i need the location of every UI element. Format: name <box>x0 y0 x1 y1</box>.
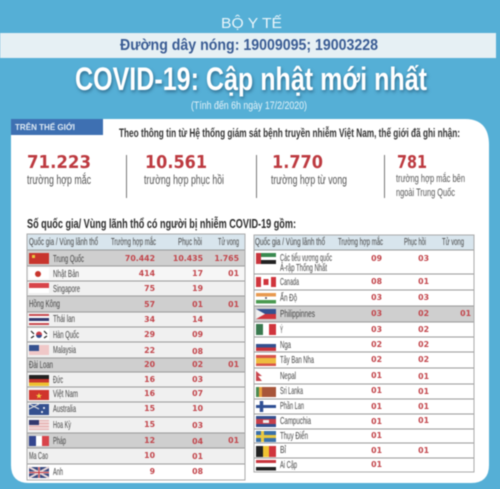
row: Malaysia: 08 <box>192 347 203 356</box>
right table header <box>255 235 464 248</box>
table heading: Số quốc gia/ Vùng lãnh thổ có người bị nhiễm COVID-19 gồm: <box>27 216 296 231</box>
row: Đức: Đức <box>53 374 63 386</box>
row: Bỉ: 01 <box>371 446 382 455</box>
row: Bỉ: 01 <box>418 446 429 455</box>
row: Nhật Bản: 17 <box>192 269 203 278</box>
row: Nepal <box>256 370 429 382</box>
row: Việt Nam: 16 <box>144 389 155 398</box>
row: Philippines: 02 <box>418 309 429 318</box>
row: Việt Nam <box>29 388 203 400</box>
row: Ma Cao: Ma Cao <box>29 450 48 462</box>
row: Nga: Nga <box>280 339 291 351</box>
row: Nga: 02 <box>371 340 382 349</box>
left table header: Quốc gia / Vùng lãnh thổ <box>29 236 98 248</box>
row: Việt Nam: ★ <box>35 392 43 400</box>
stat: cases: 71.223 <box>27 152 91 173</box>
row: Ai Cập: Ai Cập <box>280 459 297 471</box>
row: Trung Quốc: 70.442 <box>125 254 155 263</box>
stat: deaths <box>271 152 347 187</box>
row: Thái Lan <box>29 313 204 325</box>
row: Singapore: Singapore <box>53 283 80 295</box>
row: Thái Lan: 34 <box>144 315 156 324</box>
hotline band <box>0 33 496 58</box>
right table <box>254 235 474 472</box>
left table header <box>29 235 239 248</box>
left table header: Trường hợp mắc <box>111 235 156 248</box>
stat: outside China: ngoài Trung Quốc <box>396 187 455 199</box>
row: Nhật Bản <box>29 268 239 280</box>
section tab: TRÊN THẾ GIỚI <box>15 121 75 132</box>
row: Canada: 08 <box>371 277 382 286</box>
stat: recovered: trường hợp phục hồi <box>144 173 224 187</box>
row: Đức <box>29 374 203 386</box>
row: Pháp: Pháp <box>53 435 66 447</box>
row: Sri Lanka: Sri Lanka <box>280 385 303 397</box>
row: Nepal: 01 <box>371 371 382 380</box>
row: Pháp <box>29 435 239 447</box>
row: Đài Loan <box>29 359 239 371</box>
row: Anh: 9 <box>150 467 155 476</box>
right table header: Phục hồi <box>404 236 426 248</box>
row: Ai Cập: 01 <box>371 460 382 469</box>
row: Anh: 08 <box>192 467 203 476</box>
row: Nga <box>256 339 429 351</box>
row: Phần Lan: 01 <box>418 402 429 411</box>
row: Đài Loan: 01 <box>228 360 239 369</box>
row: Australia: 15 <box>144 404 155 413</box>
row: Singapore: 19 <box>192 284 203 293</box>
row: Đức: 16 <box>144 375 155 384</box>
row: Thái Lan: Thái lan <box>53 313 75 325</box>
row: Sri Lanka: 01 <box>418 387 429 396</box>
row: Hồng Kông <box>29 298 239 310</box>
row: Hồng Kông: 01 <box>228 300 239 309</box>
row: Australia: 10 <box>192 404 204 413</box>
row: Ấn Độ: Ấn Độ <box>280 291 297 304</box>
row: UAE: 03 <box>418 254 429 263</box>
row: Malaysia <box>29 344 203 356</box>
row: Thụy Điển: 01 <box>371 431 382 440</box>
stat: outside China: trường hợp mắc bên <box>396 172 465 185</box>
row: Thụy Điển: Thụy Điển <box>280 430 308 442</box>
row: Singapore <box>29 283 203 295</box>
stat: deaths: 1.770 <box>272 152 323 173</box>
row: Ma Cao: 01 <box>192 452 203 461</box>
row: Hoa Kỳ: 15 <box>144 420 155 429</box>
row: Đài Loan: 20 <box>144 360 156 369</box>
right table header: Trường hợp mắc <box>338 235 383 248</box>
row: Đức: 03 <box>192 375 203 384</box>
stat: outside China <box>396 152 465 199</box>
row: UAE: Các tiểu vương quốc <box>280 252 332 264</box>
row: Hàn Quốc: Hàn Quốc <box>53 329 79 341</box>
row: Trung Quốc <box>29 253 239 265</box>
row: Singapore: 75 <box>144 284 155 293</box>
row: Nhật Bản: 414 <box>139 269 156 278</box>
row: Canada: 01 <box>418 277 429 286</box>
row: Campuchia <box>256 415 429 427</box>
row: Pháp: 04 <box>192 437 204 446</box>
main white panel <box>11 119 489 483</box>
left table header: Tử vong <box>218 236 239 248</box>
row: Ma Cao: 10 <box>144 451 156 460</box>
row: Thụy Điển <box>256 430 382 442</box>
row: Hàn Quốc: 09 <box>192 330 203 339</box>
row: Thái Lan: 14 <box>192 315 204 324</box>
row: Ý: 02 <box>418 325 429 334</box>
row: Australia <box>29 403 204 415</box>
row: Campuchia: 01 <box>371 417 382 426</box>
row: Campuchia: Campuchia <box>280 415 311 427</box>
row: Philippines: Philippinnes <box>280 308 315 320</box>
row: Ấn Độ: 03 <box>371 293 382 302</box>
row: Việt Nam: 07 <box>192 389 203 398</box>
row: Tây Ban Nha: 02 <box>418 355 429 364</box>
row: Phần Lan: 01 <box>371 402 382 411</box>
row: UAE: Ả-rập Thống Nhất <box>280 261 327 274</box>
right table header: Quốc gia / Vùng lãnh thổ <box>255 236 325 248</box>
row: Malaysia: Malaysia <box>53 344 76 356</box>
row: UAE: 09 <box>371 254 382 263</box>
row: Philippines <box>256 308 471 320</box>
row: Nepal: Nepal <box>280 370 296 382</box>
row: Australia: Australia <box>53 403 76 415</box>
row: Hoa Kỳ: 03 <box>192 421 203 430</box>
left table header: Phục hồi <box>178 236 202 248</box>
row: Nga: 02 <box>418 340 429 349</box>
row: Hồng Kông: 57 <box>144 300 155 309</box>
row: Ấn Độ: 03 <box>418 293 429 302</box>
row: Trung Quốc: 10.435 <box>173 254 203 263</box>
row: Campuchia: 01 <box>418 416 429 425</box>
row: Phần Lan <box>256 400 429 412</box>
row: Canada: Canada <box>280 276 299 288</box>
row: Nepal: 01 <box>418 372 429 381</box>
row: Tây Ban Nha: 02 <box>371 355 382 364</box>
row: Việt Nam: Việt Nam <box>53 388 78 400</box>
row: Ý: 03 <box>371 325 382 334</box>
row: Sri Lanka <box>256 385 429 397</box>
row: Ý: Ý <box>280 323 283 336</box>
row: UAE <box>256 252 429 274</box>
row: Pháp: 01 <box>228 436 239 445</box>
row: Philippines: 03 <box>371 309 382 318</box>
row: Ma Cao <box>29 450 203 462</box>
row: Hàn Quốc: 29 <box>144 330 155 339</box>
row: Hồng Kông: Hồng Kông <box>29 298 60 310</box>
row: Anh <box>29 466 203 478</box>
row: Anh: Anh <box>53 466 63 478</box>
stat: outside China: 781 <box>397 152 427 173</box>
row: Canada <box>256 276 429 288</box>
row: Hoa Kỳ: Hoa Kỳ <box>53 419 71 431</box>
right table header: Tử vong <box>442 236 464 248</box>
section tab <box>11 119 103 135</box>
row: Hoa Kỳ <box>29 419 203 431</box>
stat: cases: trường hợp mắc <box>27 172 91 187</box>
row: Ấn Độ <box>256 291 429 304</box>
row: Philippines: 01 <box>460 309 471 318</box>
row: Pháp: 12 <box>144 436 155 445</box>
row: Trung Quốc: 1.765 <box>214 254 239 263</box>
row: Sri Lanka: 01 <box>371 386 382 395</box>
stat: recovered: 10.561 <box>145 152 207 173</box>
row: Hàn Quốc <box>29 329 203 341</box>
date note: (Tính đến 6h ngày 17/2/2020) <box>191 100 307 112</box>
stat: deaths: trường hợp từ vong <box>271 173 347 187</box>
row: Trung Quốc: Trung Quốc <box>53 253 84 265</box>
row: Ai Cập <box>256 459 382 471</box>
row: Nhật Bản: Nhật Bản <box>53 268 79 280</box>
row: Bỉ: Bỉ <box>280 444 286 456</box>
row: Phần Lan: Phần Lan <box>280 400 304 412</box>
row: Đài Loan: 02 <box>192 360 203 369</box>
row: Tây Ban Nha <box>256 354 429 366</box>
left table <box>27 234 245 480</box>
row: Bỉ <box>256 444 429 457</box>
header organisation name: BỘ Y TẾ <box>221 15 282 32</box>
hotline band: Đường dây nóng: 19009095; 19003228 <box>120 37 378 54</box>
row: Ý <box>256 323 429 336</box>
row: Malaysia: 22 <box>144 346 155 355</box>
row: Tây Ban Nha: Tây Ban Nha <box>280 354 314 366</box>
stat: recovered <box>144 152 224 187</box>
stat: cases <box>27 152 91 187</box>
row: Nhật Bản: 01 <box>228 269 239 278</box>
row: Đài Loan: Đài Loan <box>29 359 53 371</box>
row: Hồng Kông: 01 <box>192 300 203 309</box>
